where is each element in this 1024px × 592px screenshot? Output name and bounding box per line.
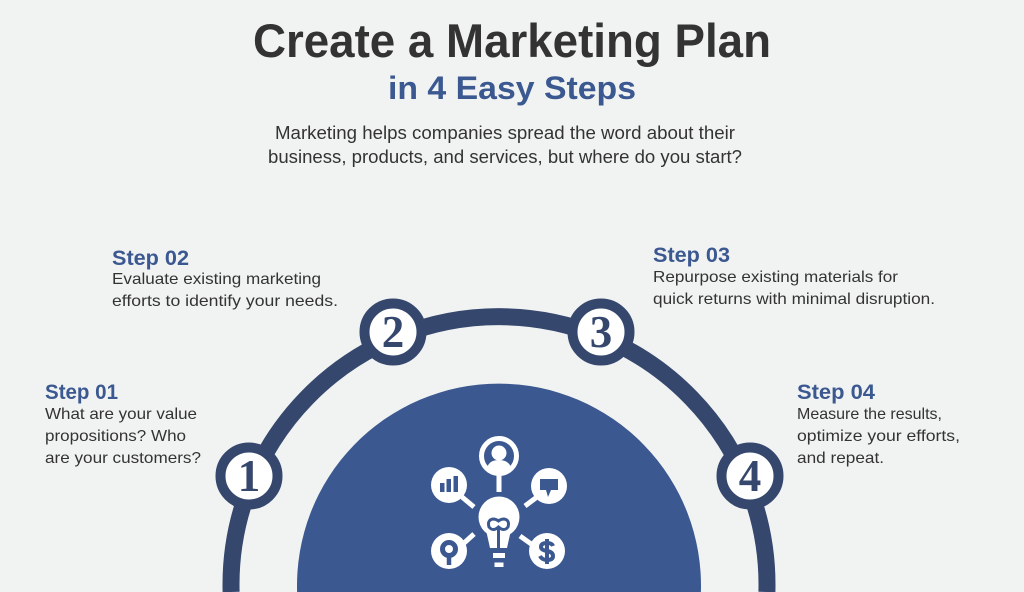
step 2 marker: [364, 304, 422, 360]
step 01 text: What are your value: [45, 406, 197, 423]
step 04 text: and repeat.: [797, 450, 884, 467]
intro text: [268, 123, 742, 167]
icon: bar chart: [431, 467, 467, 503]
intro text: business, products, and services, but where do you start?: [268, 147, 742, 167]
title: Create a Marketing Plan: [253, 14, 771, 67]
icon: speech bubble: [531, 468, 567, 504]
step 3 marker: [572, 304, 630, 360]
step 02 text: efforts to identify your needs.: [112, 293, 338, 310]
step 03 text: Step 03: [653, 244, 730, 267]
central blue semicircle: [297, 384, 701, 592]
arc connecting the steps: [231, 317, 767, 592]
step 03 text: Repurpose existing materials for: [653, 269, 899, 286]
step 04 text: optimize your efforts,: [797, 428, 960, 445]
step 1 marker: 1: [238, 451, 260, 501]
icon: light bulb: [478, 496, 520, 567]
step 01 text: are your customers?: [45, 450, 201, 467]
intro text: Marketing helps companies spread the word about their: [275, 123, 735, 143]
icon: marketing idea cluster: [431, 438, 567, 569]
step 1 marker: [220, 448, 278, 504]
icon: dollar coin: [529, 533, 565, 569]
step 04 text: [797, 381, 960, 467]
step 02 text: Evaluate existing marketing: [112, 271, 321, 288]
step 01 text: Step 01: [45, 381, 118, 404]
icon: location key: [431, 533, 467, 569]
step 03 text: quick returns with minimal disruption.: [653, 291, 935, 308]
step 01 text: [45, 381, 201, 467]
step 03 text: [653, 244, 935, 308]
step 02 text: Step 02: [112, 247, 189, 270]
step 04 text: Step 04: [797, 381, 875, 404]
icon: person: [482, 438, 516, 474]
step 3 marker: 3: [590, 307, 612, 357]
step 02 text: [112, 247, 338, 310]
step 4 marker: 4: [739, 451, 761, 501]
step 4 marker: [722, 448, 778, 504]
step 2 marker: 2: [382, 307, 404, 357]
step 04 text: Measure the results,: [797, 406, 942, 423]
subtitle: in 4 Easy Steps: [388, 70, 636, 106]
icon: connector lines: [462, 472, 537, 546]
step 01 text: propositions? Who: [45, 428, 186, 445]
